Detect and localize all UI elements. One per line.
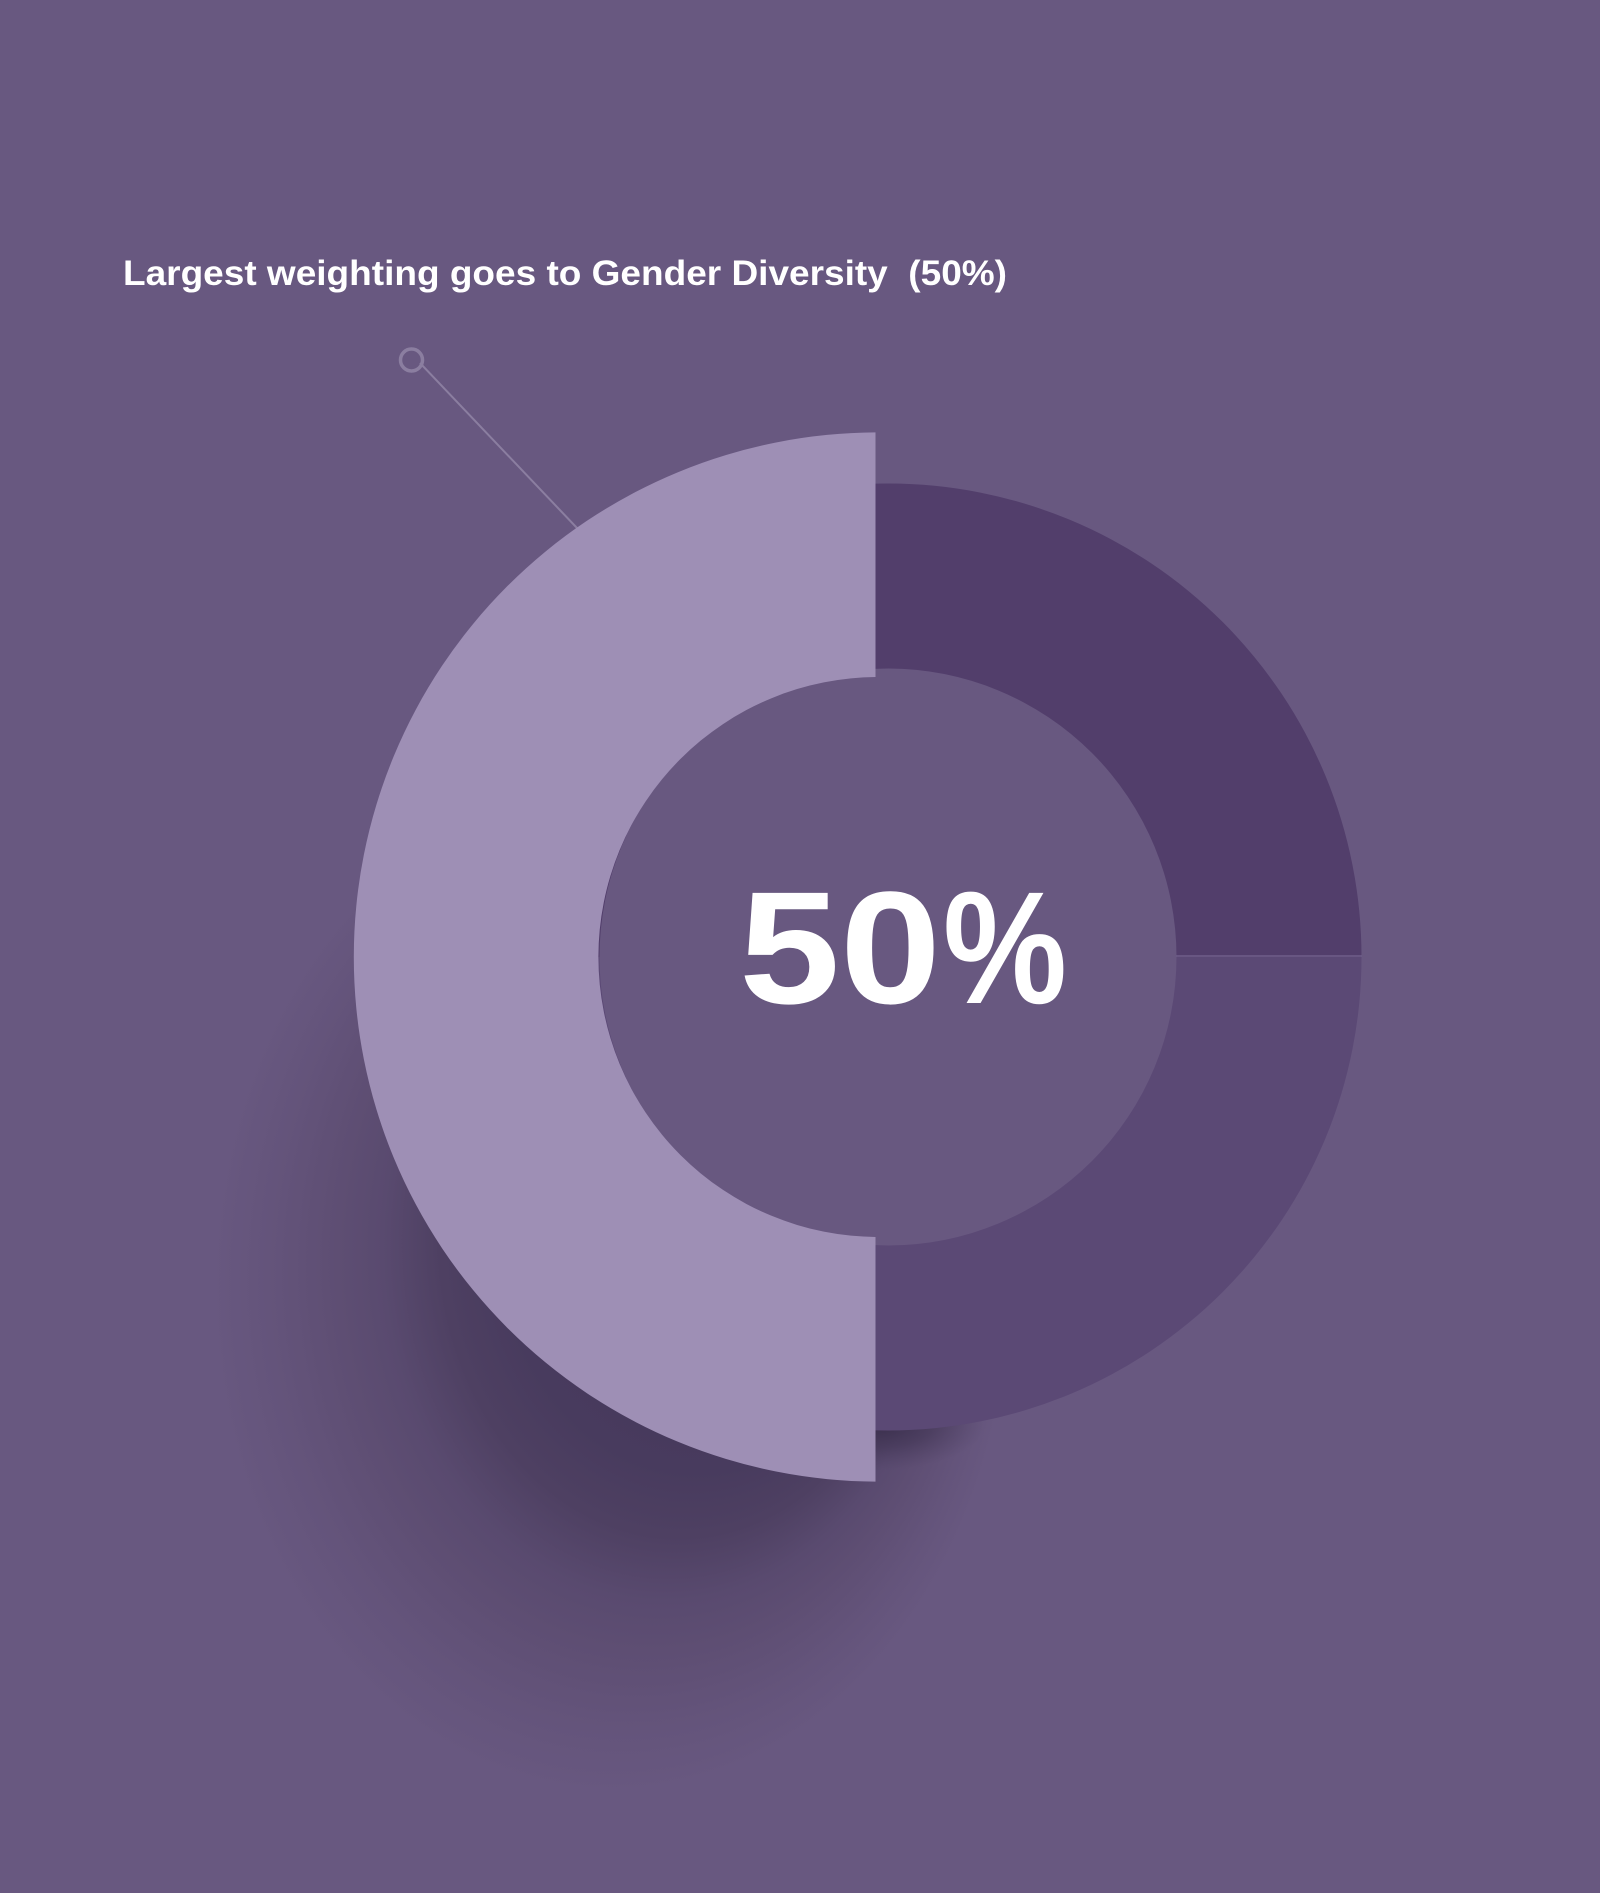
title: Largest weighting goes to Gender Diversity (50%) [123,254,1007,293]
segment: upper right [414,484,1362,957]
donut chart [354,432,1403,1482]
centre value [739,858,1067,1037]
segment divider [1176,955,1362,957]
centre disc [598,667,1178,1247]
callout leader line with marker [400,349,577,528]
drop shadow [210,785,1010,1795]
infographic canvas [125,260,1362,1700]
centre value: % [943,858,1067,1037]
segment: lower right [414,957,1362,1430]
centre value: 50 [739,858,941,1037]
segment: gender diversity 50% [354,432,876,1482]
